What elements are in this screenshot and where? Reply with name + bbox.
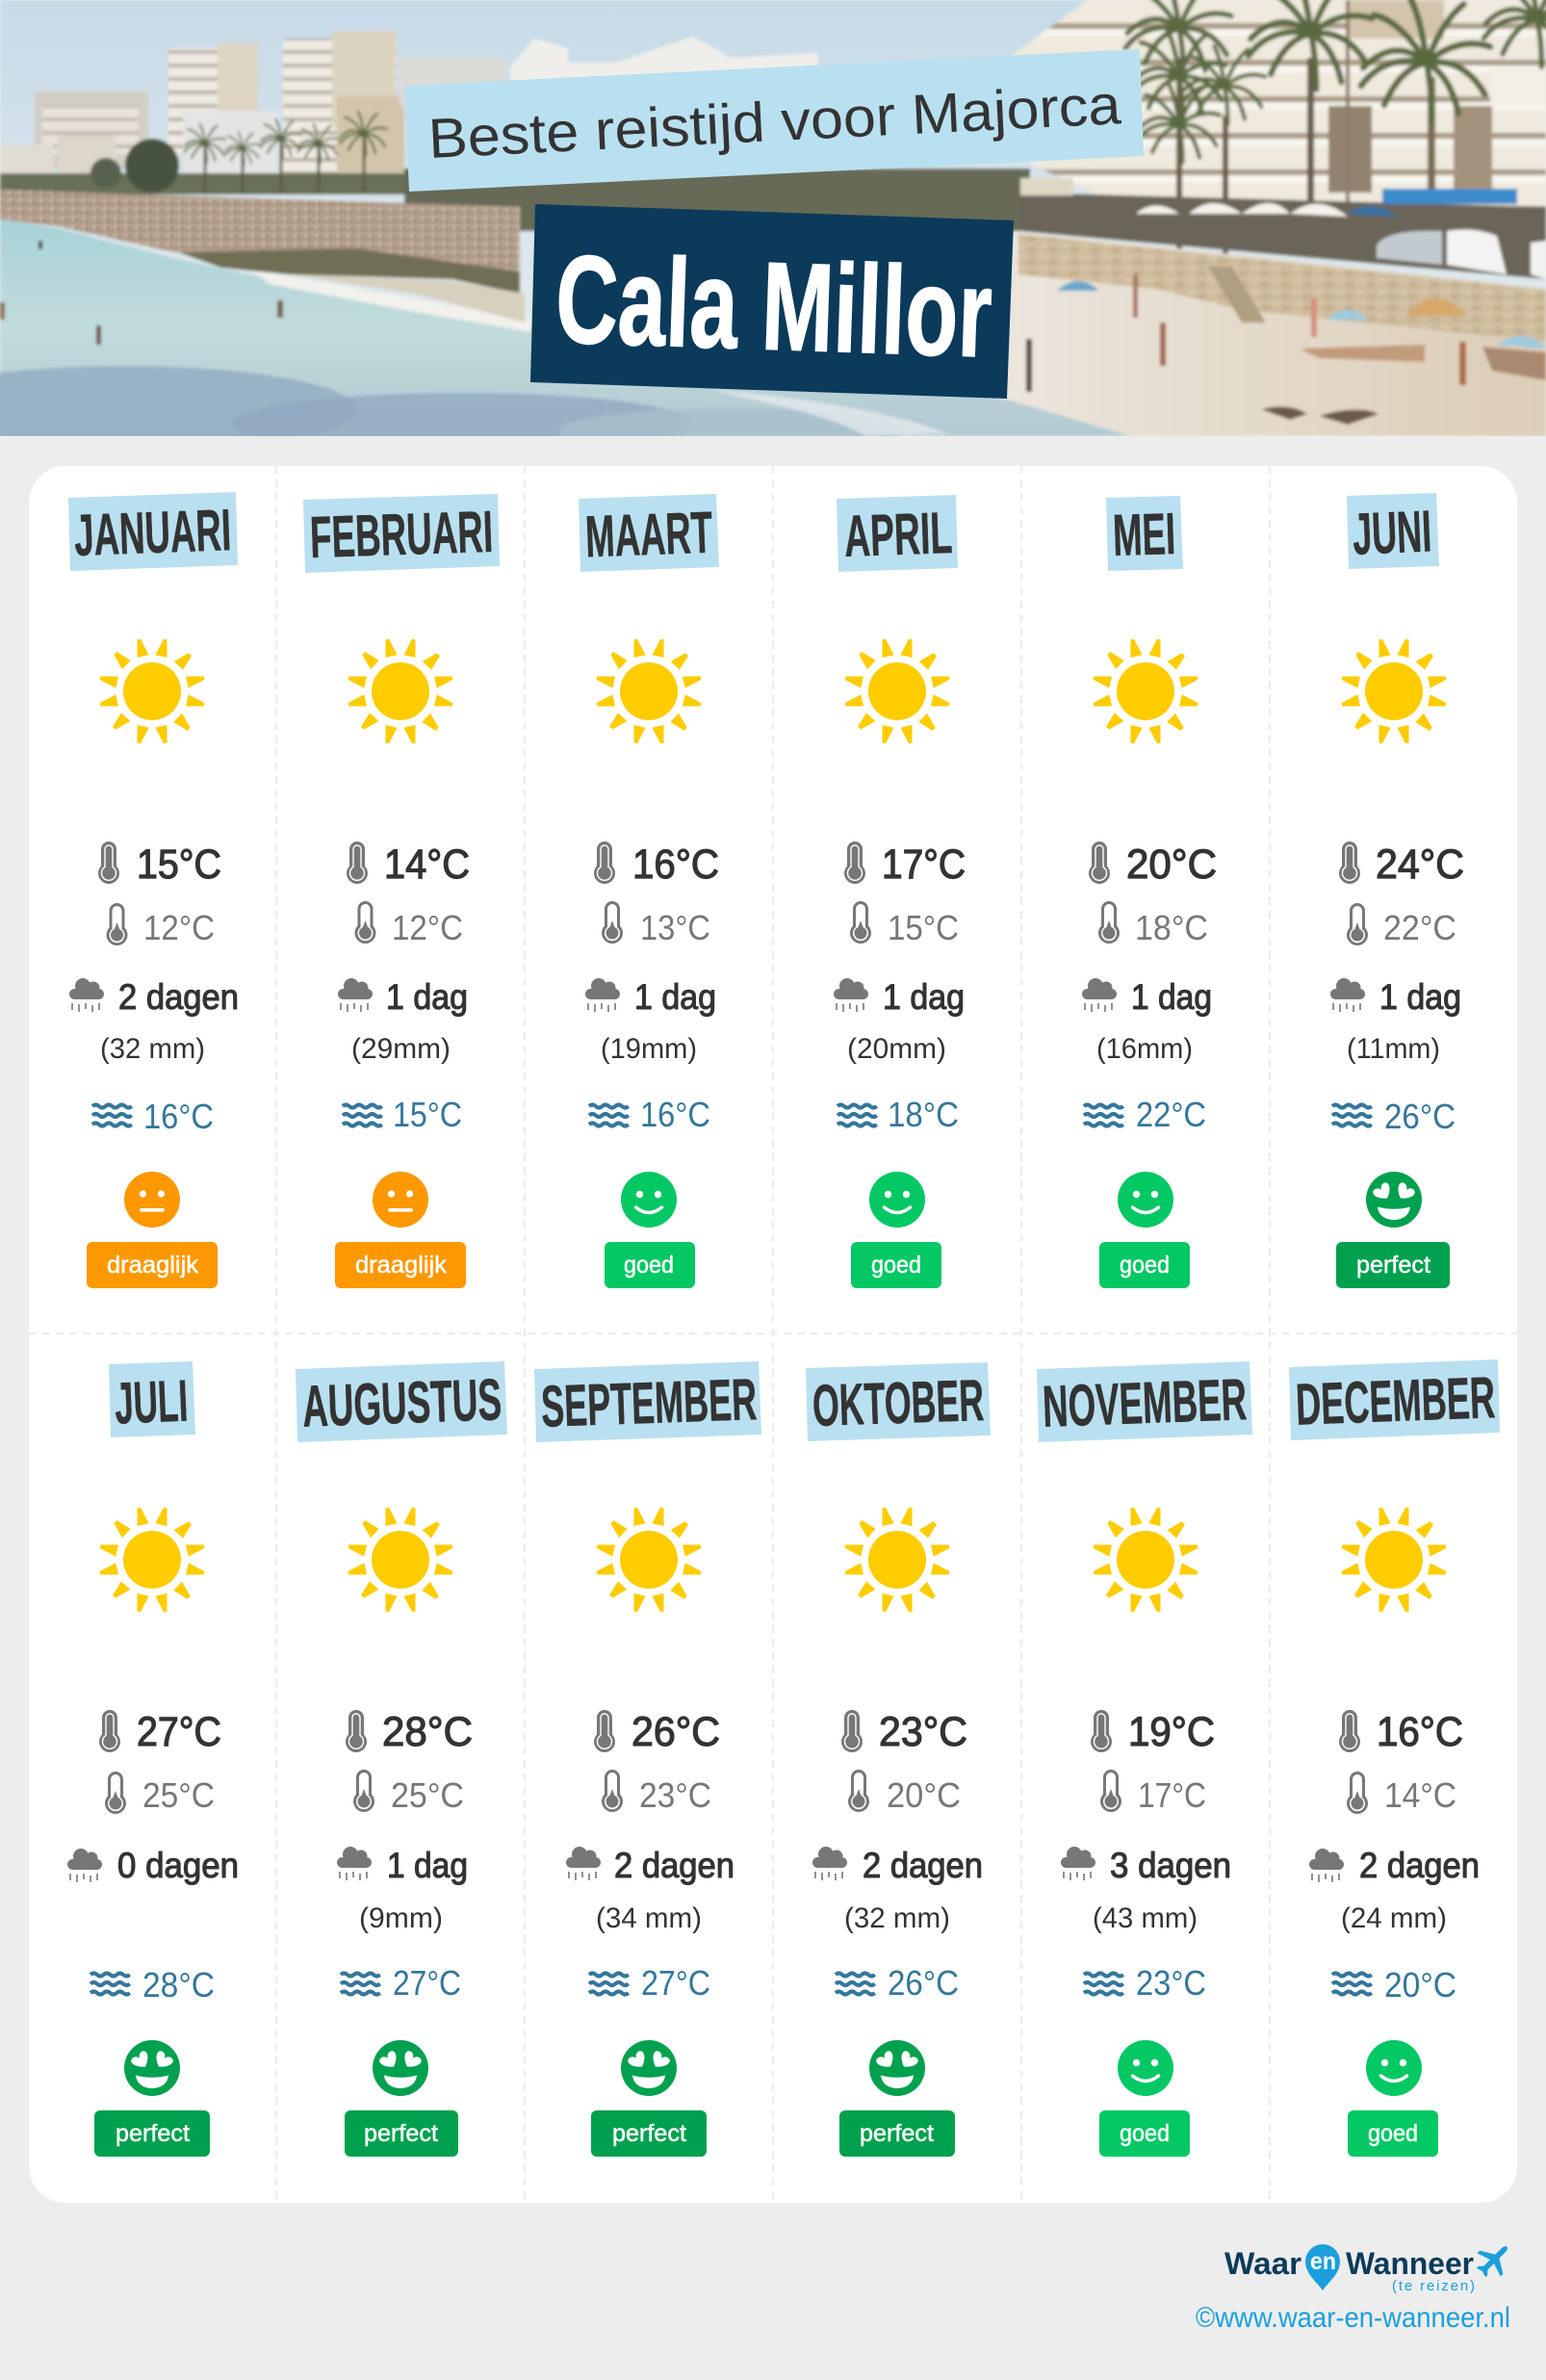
- heading: oktober: OKTOBER: [812, 1367, 985, 1438]
- min temperature: 14°C: [1384, 1775, 1456, 1815]
- heading: september: [534, 1361, 761, 1442]
- icon: sun: [845, 1508, 949, 1612]
- max temperature: [1339, 841, 1464, 888]
- min temperature: [1098, 901, 1208, 947]
- icon: sun: [348, 639, 452, 743]
- sea temperature: [90, 1965, 215, 2005]
- min temperature: 20°C: [887, 1775, 961, 1815]
- min temperature: [1100, 1770, 1206, 1815]
- rating: [591, 2040, 707, 2157]
- rain days: [69, 977, 239, 1017]
- rating: [1099, 1172, 1190, 1288]
- rating: goed: [1120, 2120, 1170, 2147]
- sea temperature: [1084, 1095, 1206, 1134]
- rating: [839, 2040, 955, 2157]
- rating: goed: [871, 1252, 921, 1279]
- min temperature: 25°C: [142, 1775, 215, 1815]
- icon: sun: [1094, 1508, 1198, 1612]
- rainfall: (32 mm): [100, 1033, 205, 1065]
- rating: [851, 1172, 941, 1288]
- rain days: [1061, 1846, 1231, 1885]
- rain days: [566, 1846, 734, 1885]
- icon: sun: [1342, 1508, 1446, 1612]
- month: maart: [579, 494, 719, 1288]
- rainfall: (16mm): [1096, 1033, 1193, 1065]
- min temperature: 25°C: [391, 1775, 464, 1815]
- max temperature: [844, 841, 966, 888]
- sea temperature: 26°C: [888, 1963, 959, 2003]
- heading: februari: FEBRUARI: [309, 499, 494, 570]
- rating: [1348, 2040, 1438, 2157]
- logo: Waar en Wanneer: (te reizen): [1392, 2278, 1475, 2294]
- month: januari: [68, 492, 239, 1288]
- rain days: [338, 977, 468, 1017]
- heading: november: [1037, 1361, 1252, 1442]
- max temperature: 26°C: [631, 1709, 720, 1755]
- max temperature: [1339, 1709, 1463, 1755]
- rain days: 2 dagen: [614, 1846, 734, 1885]
- sea temperature: 15°C: [393, 1095, 462, 1134]
- min temperature: [848, 1770, 961, 1815]
- rainfall: (32 mm): [844, 1902, 950, 1934]
- max temperature: 20°C: [1126, 841, 1217, 888]
- logo: Waar en Wanneer: en: [1310, 2248, 1336, 2275]
- min temperature: [105, 1772, 215, 1815]
- sea temperature: [836, 1963, 959, 2003]
- rainfall: (20mm): [847, 1033, 946, 1065]
- rating: [1336, 1172, 1450, 1288]
- copyright url: ©www.waar-en-wanneer.nl: [1196, 2302, 1510, 2334]
- min temperature: [602, 901, 710, 947]
- max temperature: [594, 841, 719, 888]
- min temperature: 15°C: [888, 908, 959, 947]
- rating: draaglijk: [355, 1252, 448, 1279]
- heading: augustus: [296, 1361, 507, 1442]
- min temperature: 22°C: [1383, 908, 1456, 947]
- location banner: Cala Millor: [530, 204, 1014, 399]
- max temperature: [99, 1709, 221, 1755]
- heading: januari: [68, 492, 238, 571]
- max temperature: 16°C: [1377, 1709, 1463, 1755]
- rain days: 1 dag: [387, 1846, 468, 1885]
- heading: februari: [303, 494, 500, 573]
- rain days: [1082, 977, 1212, 1017]
- icon: sun: [100, 1508, 204, 1612]
- heading: juni: [1347, 493, 1439, 569]
- rain days: 1 dag: [883, 977, 965, 1017]
- rain days: [812, 1846, 983, 1885]
- max temperature: [1089, 841, 1217, 888]
- location banner: Cala Millor: Cala Millor: [554, 228, 994, 383]
- sea temperature: 27°C: [641, 1963, 710, 2003]
- month: november: [1037, 1361, 1252, 2157]
- sea temperature: 18°C: [888, 1095, 959, 1134]
- rainfall: (11mm): [1347, 1033, 1440, 1065]
- min temperature: 12°C: [143, 908, 215, 947]
- heading: maart: [579, 494, 719, 572]
- icon: sun: [1094, 639, 1198, 743]
- rain days: 3 dagen: [1110, 1846, 1231, 1885]
- min temperature: 18°C: [1135, 908, 1208, 947]
- max temperature: 14°C: [384, 841, 470, 888]
- sea temperature: [589, 1963, 710, 2003]
- rainfall: (9mm): [359, 1902, 443, 1934]
- rain days: 1 dag: [1131, 977, 1212, 1017]
- rating: [335, 1172, 466, 1288]
- heading: juni: JUNI: [1352, 498, 1432, 567]
- rain days: 1 dag: [1379, 977, 1461, 1017]
- icon: sun: [1342, 639, 1446, 743]
- min temperature: [354, 901, 463, 947]
- max temperature: 24°C: [1376, 841, 1464, 888]
- rainfall: (19mm): [601, 1033, 697, 1065]
- min temperature: 17°C: [1138, 1775, 1206, 1815]
- icon: sun: [597, 639, 701, 743]
- rating: [87, 1172, 218, 1288]
- rain days: 1 dag: [634, 977, 716, 1017]
- rating: perfect: [116, 2120, 190, 2147]
- logo: Waar en Wanneer: [1224, 2235, 1519, 2294]
- heading: april: APRIL: [843, 500, 953, 569]
- min temperature: [106, 903, 215, 947]
- month: oktober: [806, 1362, 991, 2157]
- rating: goed: [1368, 2120, 1418, 2147]
- max temperature: 27°C: [137, 1709, 221, 1755]
- min temperature: 13°C: [640, 908, 710, 947]
- rain days: [834, 977, 965, 1017]
- month: juni: [1330, 493, 1464, 1288]
- rain days: [67, 1846, 239, 1885]
- heading: januari: JANUARI: [73, 497, 232, 568]
- max temperature: 15°C: [137, 841, 221, 888]
- rating: [605, 1172, 695, 1288]
- sea temperature: 16°C: [143, 1097, 214, 1136]
- rainfall: (43 mm): [1093, 1902, 1198, 1934]
- rating: [345, 2040, 458, 2157]
- title banner: Beste reistijd voor Majorca: [426, 73, 1123, 170]
- rain days: 0 dagen: [117, 1846, 239, 1885]
- logo: Waar en Wanneer: Waar: [1224, 2246, 1301, 2281]
- sea temperature: 28°C: [142, 1965, 215, 2005]
- heading: juli: [109, 1361, 195, 1437]
- min temperature: [602, 1770, 711, 1815]
- logo: Waar en Wanneer: Wanneer: [1346, 2246, 1474, 2281]
- rain days: 2 dagen: [118, 977, 239, 1017]
- sea temperature: [1332, 1965, 1456, 2005]
- heading: september: SEPTEMBER: [540, 1366, 758, 1439]
- min temperature: [850, 901, 959, 947]
- month: april: [834, 495, 966, 1288]
- min temperature: [1347, 903, 1456, 947]
- heading: maart: MAART: [584, 500, 713, 569]
- max temperature: 17°C: [882, 841, 966, 888]
- sea temperature: [343, 1095, 462, 1134]
- heading: mei: MEI: [1112, 501, 1176, 568]
- max temperature: [98, 841, 221, 888]
- sea temperature: [1332, 1097, 1456, 1136]
- rating: draaglijk: [107, 1252, 199, 1279]
- icon: sun: [100, 639, 204, 743]
- rating: [1099, 2040, 1190, 2157]
- heading: april: [837, 495, 958, 572]
- icon: sun: [845, 639, 949, 743]
- month: augustus: [296, 1361, 507, 2157]
- sea temperature: 26°C: [1384, 1097, 1456, 1136]
- max temperature: [594, 1709, 720, 1755]
- rain days: [1330, 977, 1461, 1017]
- rating: perfect: [860, 2120, 934, 2147]
- rain days: [585, 977, 716, 1017]
- sea temperature: [1084, 1963, 1206, 2003]
- heading: oktober: [806, 1362, 991, 1441]
- title banner: [404, 49, 1144, 192]
- sea temperature: 23°C: [1136, 1963, 1206, 2003]
- max temperature: [1091, 1709, 1215, 1755]
- header photo: Cala Millor beach: [0, 0, 1546, 454]
- rain days: 2 dagen: [863, 1846, 983, 1885]
- max temperature: 28°C: [382, 1709, 473, 1755]
- rainfall: (29mm): [351, 1033, 451, 1065]
- min temperature: [353, 1770, 464, 1815]
- rating: [94, 2040, 210, 2157]
- rain days: [1309, 1846, 1480, 1885]
- heading: november: NOVEMBER: [1042, 1366, 1248, 1439]
- sea temperature: 20°C: [1384, 1965, 1456, 2005]
- rain days: 1 dag: [386, 977, 468, 1017]
- rating: perfect: [1356, 1252, 1430, 1279]
- icon: sun: [597, 1508, 701, 1612]
- sea temperature: [92, 1097, 214, 1136]
- min temperature: 12°C: [392, 908, 463, 947]
- max temperature: 23°C: [879, 1709, 967, 1755]
- rating: goed: [1120, 1252, 1170, 1279]
- rainfall: (24 mm): [1341, 1902, 1447, 1934]
- rainfall: (34 mm): [596, 1902, 702, 1934]
- max temperature: [841, 1709, 967, 1755]
- sea temperature: [341, 1963, 461, 2003]
- sea temperature: [837, 1095, 959, 1134]
- rating: goed: [624, 1252, 674, 1279]
- rain days: 2 dagen: [1359, 1846, 1480, 1885]
- month: juli: [67, 1361, 239, 2157]
- min temperature: [1347, 1772, 1456, 1815]
- sea temperature: 16°C: [640, 1095, 710, 1134]
- rating: perfect: [612, 2120, 686, 2147]
- month: december: [1289, 1359, 1500, 2157]
- min temperature: 23°C: [639, 1775, 711, 1815]
- rain days: [337, 1846, 468, 1885]
- month: februari: [303, 494, 500, 1288]
- month: mei: [1082, 496, 1217, 1288]
- max temperature: 19°C: [1128, 1709, 1215, 1755]
- heading: augustus: AUGUSTUS: [301, 1366, 502, 1439]
- panel: weather calendar: [29, 466, 1517, 2203]
- max temperature: 16°C: [632, 841, 719, 888]
- heading: mei: [1106, 496, 1183, 571]
- heading: juli: JULI: [114, 1367, 189, 1436]
- icon: sun: [348, 1508, 452, 1612]
- month: september: [534, 1361, 761, 2157]
- max temperature: [347, 841, 470, 888]
- sea temperature: 27°C: [393, 1963, 461, 2003]
- rating: perfect: [364, 2120, 438, 2147]
- sea temperature: 22°C: [1136, 1095, 1206, 1134]
- sea temperature: [589, 1095, 710, 1134]
